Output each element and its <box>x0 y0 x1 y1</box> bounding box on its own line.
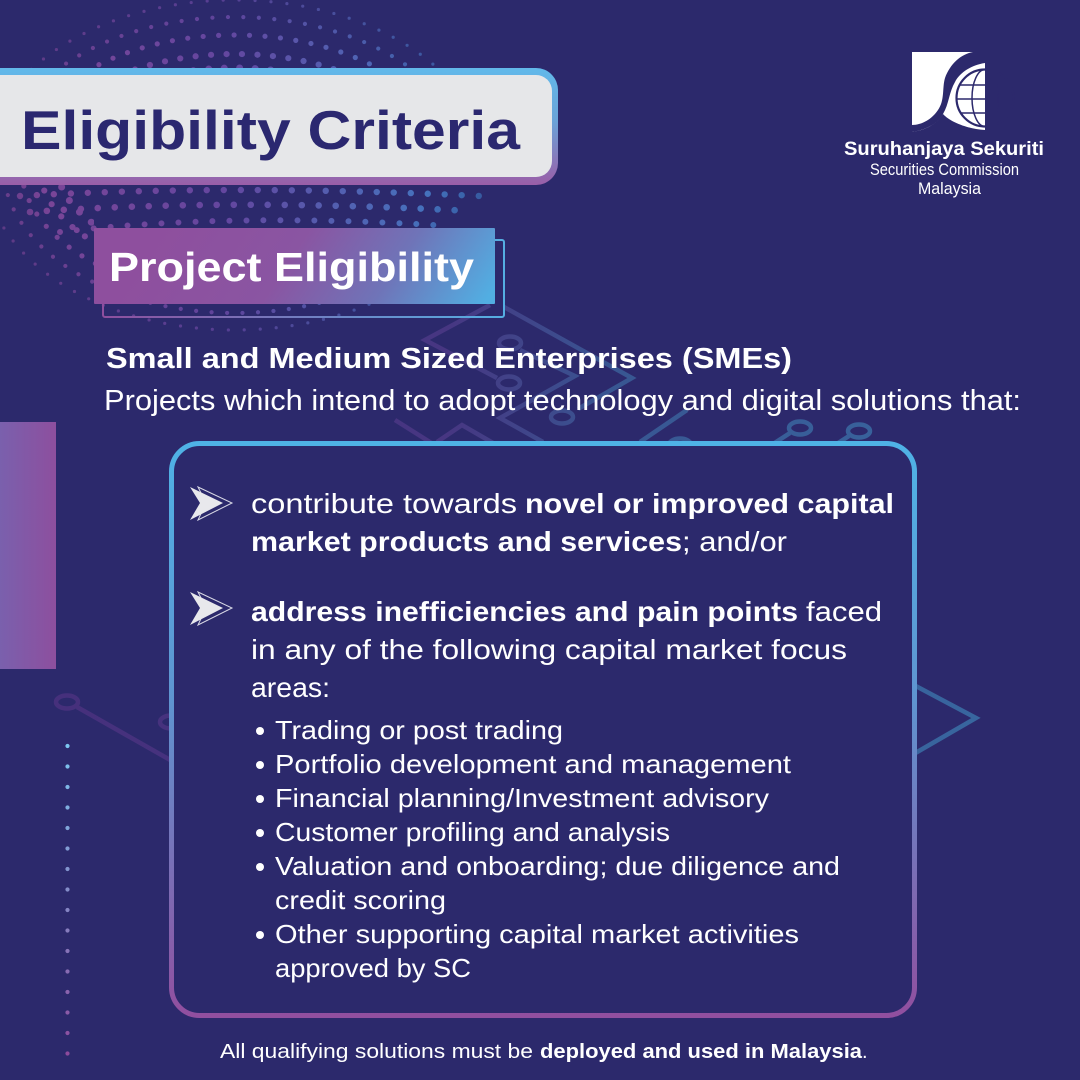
focus areas list: Customer profiling and analysis <box>275 817 670 847</box>
criterion 2 text <box>251 596 882 703</box>
logo: Securities Commission Malaysia: Securities Commission <box>870 160 1019 179</box>
criterion 1 text: market products and services <box>251 526 682 557</box>
focus areas list: Other supporting capital market activities <box>275 919 799 949</box>
logo: Securities Commission Malaysia: Malaysia <box>918 179 981 198</box>
focus areas list: Valuation and onboarding; due diligence and <box>275 851 840 881</box>
focus areas list: Financial planning/Investment advisory <box>275 783 769 813</box>
logo wordmark: Suruhanjaya Sekuriti <box>844 139 1044 160</box>
footer note <box>220 1041 868 1063</box>
criterion 2 text: areas: <box>251 672 330 703</box>
halftone dot pattern <box>0 0 485 330</box>
criterion 1 text <box>251 488 894 557</box>
focus areas list: approved by SC <box>275 953 471 983</box>
focus areas list: Portfolio development and management <box>275 749 792 779</box>
criterion 1 text: novel or improved capital <box>525 488 894 519</box>
logo mark <box>912 48 1014 136</box>
title text: Eligibility Criteria <box>21 99 520 161</box>
circuit line decoration <box>56 305 976 761</box>
criteria panel <box>172 444 914 1016</box>
criterion 2 text: in any of the following capital market focus <box>251 634 847 665</box>
criterion 2 text: faced <box>806 596 882 627</box>
side accent bar <box>0 422 56 669</box>
section banner <box>94 228 504 317</box>
focus areas list: Trading or post trading <box>275 715 563 745</box>
focus areas list: credit scoring <box>275 885 446 915</box>
subheading: Small and Medium Sized Enterprises (SMEs) <box>106 343 792 375</box>
vertical dotted line <box>65 746 70 1054</box>
intro sentence: Projects which intend to adopt technology and digital solutions that: <box>104 385 1021 417</box>
title plaque <box>0 68 558 185</box>
criterion 1 text: ; and/or <box>682 526 787 557</box>
footer note: deployed and used in Malaysia <box>540 1041 863 1063</box>
logo: Securities Commission Malaysia <box>844 48 1044 198</box>
icon: arrow 1 <box>190 487 232 520</box>
focus areas list <box>256 715 840 983</box>
banner heading: Project Eligibility <box>109 244 474 290</box>
criterion 1 text: contribute towards <box>251 488 517 519</box>
footer note: . <box>862 1041 868 1063</box>
criterion 2 text: address inefficiencies and pain points <box>251 596 798 627</box>
footer note: All qualifying solutions must be <box>220 1041 533 1063</box>
icon: arrow 2 <box>190 592 232 625</box>
